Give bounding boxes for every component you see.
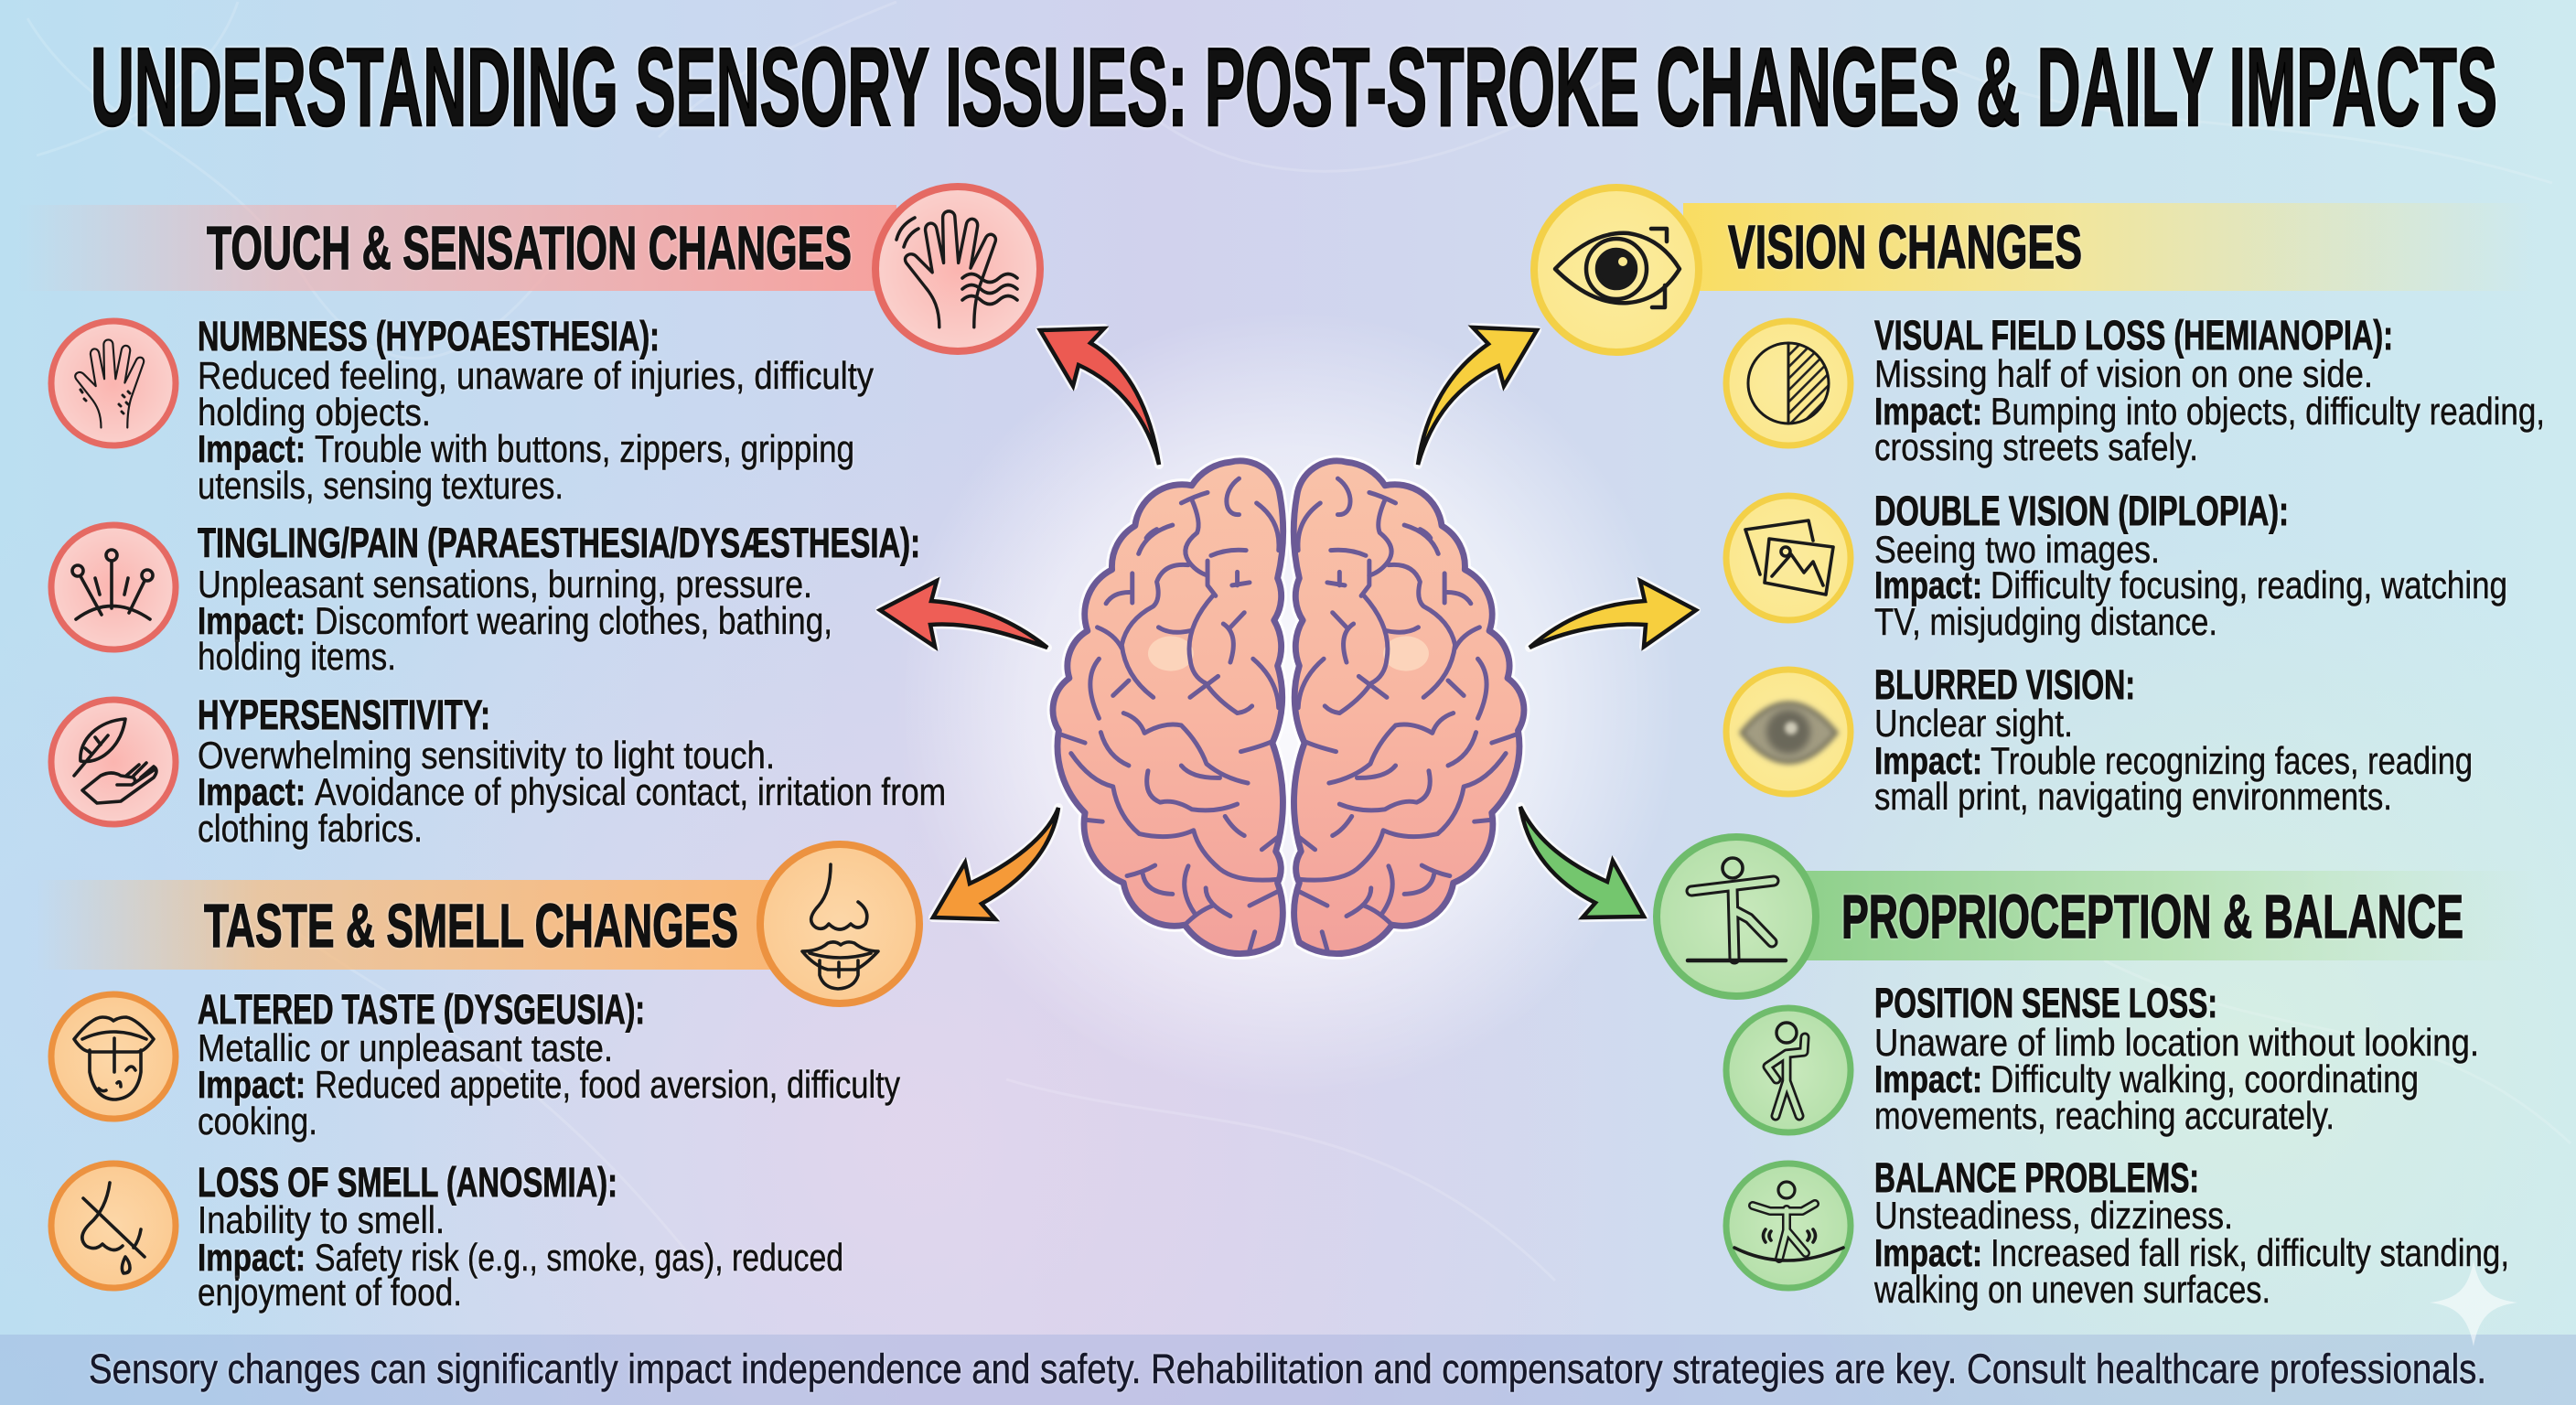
text: tingling [198, 520, 920, 678]
item: blurred vision [1726, 661, 2473, 818]
footer band [0, 1335, 2576, 1405]
panel: touch and sensation [18, 187, 1040, 850]
arrow: brain to touch [1040, 328, 1159, 465]
text: hypersensitivity: clothing fabrics. [198, 807, 423, 850]
text: altered taste: cooking. [198, 1099, 317, 1142]
text: blurred vision: Trouble recognizing faces, reading [1991, 739, 2473, 782]
sparkle mark [2430, 1260, 2517, 1346]
item: hypersensitivity [51, 692, 946, 850]
text: loss of smell: Inability to smell. [198, 1198, 445, 1241]
text: position sense: Difficulty walking, coordinating [1991, 1057, 2419, 1100]
text: tingling: Impact: [198, 599, 306, 642]
item: double vision [1726, 488, 2507, 643]
text: loss of smell: enjoyment of food. [198, 1271, 462, 1314]
text: position sense: POSITION SENSE LOSS: [1874, 980, 2217, 1026]
text: double vision [1874, 488, 2507, 643]
header bar: vision [1683, 203, 2534, 291]
item: position sense [1726, 980, 2479, 1137]
text: hypersensitivity [198, 692, 946, 850]
icon: crossed nose [51, 1164, 176, 1288]
text: position sense: Unaware of limb location without looking. [1874, 1021, 2479, 1064]
text: hypersensitivity: HYPERSENSITIVITY: [198, 692, 490, 738]
text: hypersensitivity: Impact: [198, 770, 306, 813]
icon: tongue [51, 994, 176, 1119]
header bar: touch [18, 205, 896, 291]
text: numbness: Impact: [198, 427, 306, 470]
item: visual field loss [1726, 312, 2545, 468]
text: numbness [198, 313, 874, 507]
text: balance problems: walking on uneven surfaces. [1873, 1268, 2270, 1311]
text: double vision: Impact: [1874, 563, 1982, 606]
panel: proprioception and balance [1657, 837, 2538, 1311]
text: visual field loss [1874, 312, 2545, 468]
icon: feather and hand [51, 700, 176, 824]
text: balance problems: Unsteadiness, dizziness. [1874, 1194, 2233, 1237]
text: visual field loss: VISUAL FIELD LOSS (HEMIANOPIA): [1874, 312, 2393, 359]
text: tingling: TINGLING/PAIN (PARAESTHESIA/DYSÆSTHESIA): [198, 520, 920, 566]
text: loss of smell: Safety risk (e.g., smoke, gas), reduced [315, 1236, 843, 1279]
heading: taste: TASTE & SMELL CHANGES [204, 892, 738, 960]
text: numbness: Reduced feeling, unaware of injuries, difficulty [198, 354, 874, 397]
text: double vision: TV, misjudging distance. [1874, 600, 2217, 643]
brain illustration [1053, 461, 1524, 954]
text: blurred vision: Unclear sight. [1874, 702, 2073, 745]
heading: touch: TOUCH & SENSATION CHANGES [207, 214, 852, 283]
item: balance problems [1726, 1154, 2509, 1311]
text: tingling: Unpleasant sensations, burning, pressure. [198, 563, 812, 606]
heading: vision: VISION CHANGES [1728, 213, 2082, 282]
icon: hand with waves [875, 187, 1040, 351]
text: position sense [1874, 980, 2479, 1137]
text: visual field loss: Missing half of vision on one side. [1874, 352, 2373, 395]
text: altered taste: Impact: [198, 1063, 306, 1106]
text: loss of smell: Impact: [198, 1236, 306, 1279]
arrow: brain to double vision [1530, 581, 1696, 648]
text: numbness: holding objects. [198, 391, 431, 434]
text: position sense: Impact: [1874, 1057, 1982, 1100]
text: blurred vision: BLURRED VISION: [1874, 661, 2135, 708]
item: altered taste [51, 986, 900, 1142]
icon: eye with scan brackets [1534, 188, 1699, 352]
text: balance problems: BALANCE PROBLEMS: [1874, 1154, 2199, 1201]
icon: nose and tongue [760, 844, 919, 1003]
left hemisphere [1053, 461, 1283, 954]
text: visual field loss: Impact: [1874, 390, 1982, 433]
panel: vision [1534, 188, 2545, 818]
arrow: brain to taste and smell [933, 808, 1058, 919]
text: blurred vision: Impact: [1874, 739, 1982, 782]
text: visual field loss: crossing streets safely. [1874, 425, 2198, 468]
item: loss of smell [51, 1159, 843, 1314]
text: altered taste: ALTERED TASTE (DYSGEUSIA): [198, 986, 645, 1033]
icon: person on one leg [1657, 837, 1816, 996]
icon: person on tightrope [1726, 1164, 1851, 1288]
text: loss of smell [198, 1159, 843, 1314]
icon: pins [51, 525, 176, 649]
text: tingling: holding items. [198, 635, 396, 678]
text: balance problems [1873, 1154, 2509, 1311]
text: position sense: movements, reaching accurately. [1874, 1094, 2334, 1137]
icon: two pictures [1726, 496, 1851, 620]
text: numbness: utensils, sensing textures. [198, 464, 564, 507]
central glow [895, 311, 1681, 1098]
icon: standing person [1726, 1008, 1851, 1132]
icon: numb hand [51, 321, 176, 445]
text: hypersensitivity: Avoidance of physical contact, irritation from [315, 770, 946, 813]
text: loss of smell: LOSS OF SMELL (ANOSMIA): [198, 1159, 617, 1206]
text: double vision: DOUBLE VISION (DIPLOPIA): [1874, 488, 2289, 534]
header bar: proprioception [1798, 871, 2538, 960]
text: altered taste: Metallic or unpleasant taste. [198, 1026, 613, 1069]
text: altered taste [198, 986, 900, 1142]
header bar: taste [37, 880, 778, 970]
text: numbness: Trouble with buttons, zippers, gripping [315, 427, 854, 470]
arrow: brain to tingling [880, 581, 1047, 648]
right hemisphere [1293, 461, 1524, 954]
text: hypersensitivity: Overwhelming sensitivity to light touch. [198, 734, 775, 777]
panel: taste and smell [37, 844, 919, 1314]
text: numbness: NUMBNESS (HYPOAESTHESIA): [198, 313, 660, 359]
icon: blurred eye [1726, 670, 1851, 794]
text: blurred vision: small print, navigating environments. [1874, 775, 2392, 818]
arrow: brain to vision [1418, 327, 1537, 465]
text: tingling: Discomfort wearing clothes, bathing, [315, 599, 832, 642]
text: blurred vision [1874, 661, 2473, 818]
item: numbness [51, 313, 874, 507]
text: double vision: Seeing two images. [1874, 528, 2160, 571]
item: tingling [51, 520, 920, 678]
icon: half hatched circle [1726, 321, 1851, 445]
text: altered taste: Reduced appetite, food aversion, difficulty [315, 1063, 900, 1106]
arrow: brain to proprioception [1520, 807, 1644, 917]
text: balance problems: Impact: [1874, 1231, 1982, 1274]
